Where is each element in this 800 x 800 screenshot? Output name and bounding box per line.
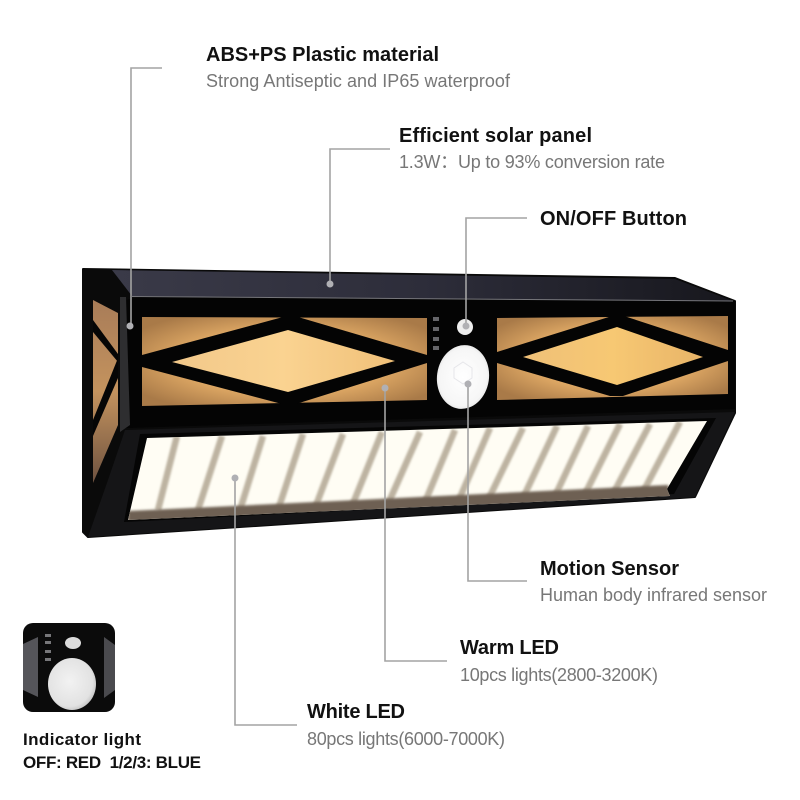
indicator dots — [433, 317, 439, 350]
motion sensor lens — [433, 342, 493, 412]
solar panel front edge — [132, 296, 733, 301]
callout: white LED: 80pcs lights(6000-7000K) — [307, 729, 505, 749]
inset button — [65, 637, 81, 649]
indicator light inset photo — [23, 623, 115, 712]
callout: efficient solar panel: Efficient solar panel — [399, 125, 592, 147]
callout: ABS+PS plastic material — [126, 44, 511, 330]
callout: motion sensor: Motion Sensor — [540, 558, 679, 580]
callout: white LED: White LED — [307, 701, 405, 723]
inset indicator dots — [45, 634, 51, 661]
indicator light caption: Indicator light — [23, 730, 141, 749]
indicator light caption: OFF: RED 1/2/3: BLUE — [23, 753, 201, 772]
callout: motion sensor: Human body infrared sensor — [540, 585, 767, 605]
warm LED window left — [142, 317, 427, 406]
indicator light caption — [23, 730, 201, 772]
bottom shadow strip — [128, 485, 672, 522]
callout: warm LED — [382, 384, 658, 685]
side window — [93, 300, 118, 483]
lower frame — [88, 412, 735, 537]
inset lens — [48, 658, 96, 710]
callout: ABS+PS plastic material: Strong Antiseptic and IP65 waterproof — [206, 71, 511, 91]
callout: ABS+PS plastic material: ABS+PS Plastic material — [206, 44, 439, 66]
callout: on/off button — [462, 208, 687, 330]
white LED panel — [128, 421, 707, 520]
inset side window right — [104, 637, 115, 698]
callout: on/off button: ON/OFF Button — [540, 208, 687, 230]
callout: motion sensor — [464, 380, 767, 605]
warm LED window right — [497, 316, 728, 400]
corner trim — [120, 297, 130, 432]
lamp body — [83, 269, 735, 537]
callout: efficient solar panel — [326, 125, 665, 288]
solar panel — [112, 270, 733, 301]
callout: white LED — [232, 474, 505, 749]
on/off button — [457, 319, 473, 335]
product: solar wall light — [83, 269, 735, 537]
LED stripes — [158, 422, 680, 510]
LED aperture shadow — [124, 418, 716, 522]
callout: warm LED: 10pcs lights(2800-3200K) — [460, 665, 658, 685]
inset side window left — [23, 637, 38, 697]
callout: warm LED: Warm LED — [460, 637, 559, 659]
callout: efficient solar panel: 1.3W：Up to 93% conversion rate — [399, 152, 665, 172]
front band — [126, 297, 735, 428]
